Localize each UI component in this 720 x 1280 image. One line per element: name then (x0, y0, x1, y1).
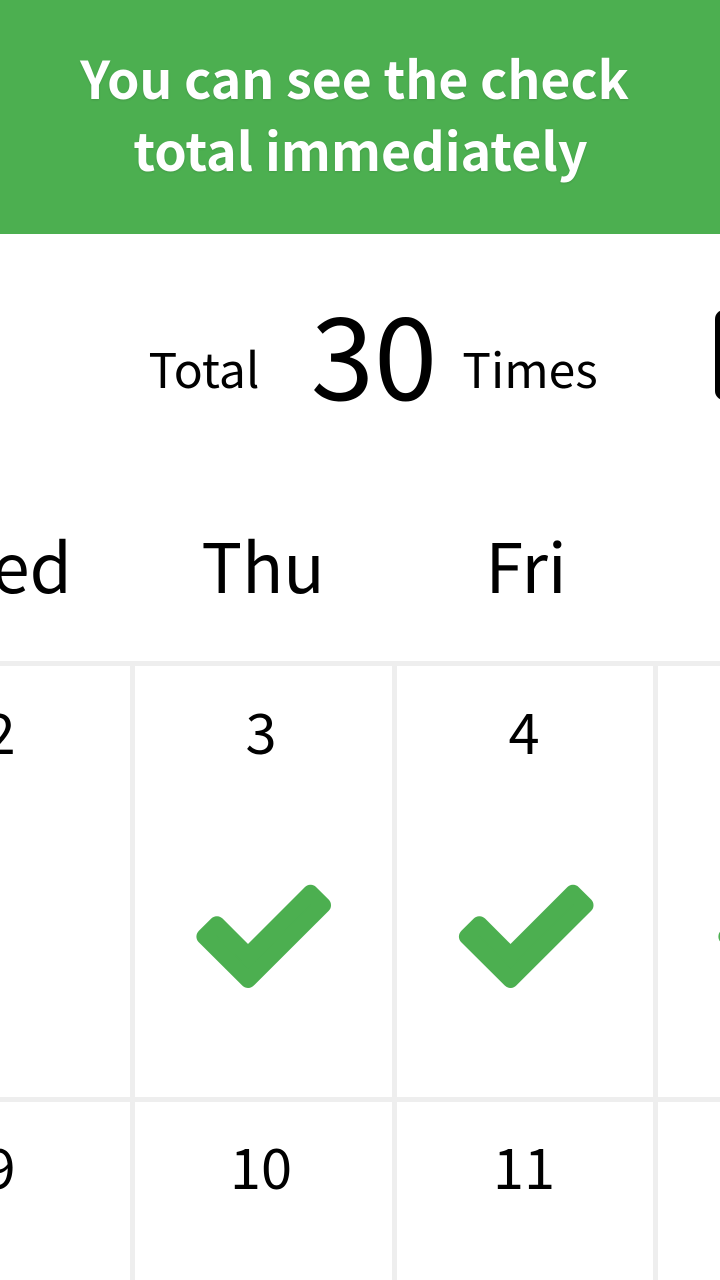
date 4: 4 (508, 690, 540, 771)
header banner (0, 0, 720, 234)
icon: check Fri (467, 893, 586, 980)
title (80, 39, 629, 186)
title: total immediately (133, 111, 588, 186)
title: You can see the check (80, 39, 629, 114)
times label: Times (462, 332, 598, 402)
partially visible button (715, 310, 720, 400)
icon: check Thu (204, 893, 323, 980)
date 11: 11 (493, 1125, 555, 1206)
total number: 30 (311, 268, 437, 433)
weekday header: Fri: Fri (485, 514, 567, 613)
weekday header: Thu: Thu (201, 514, 325, 613)
date 10: 10 (230, 1125, 292, 1206)
total label: Total (149, 332, 259, 402)
date 3: 3 (245, 690, 277, 771)
